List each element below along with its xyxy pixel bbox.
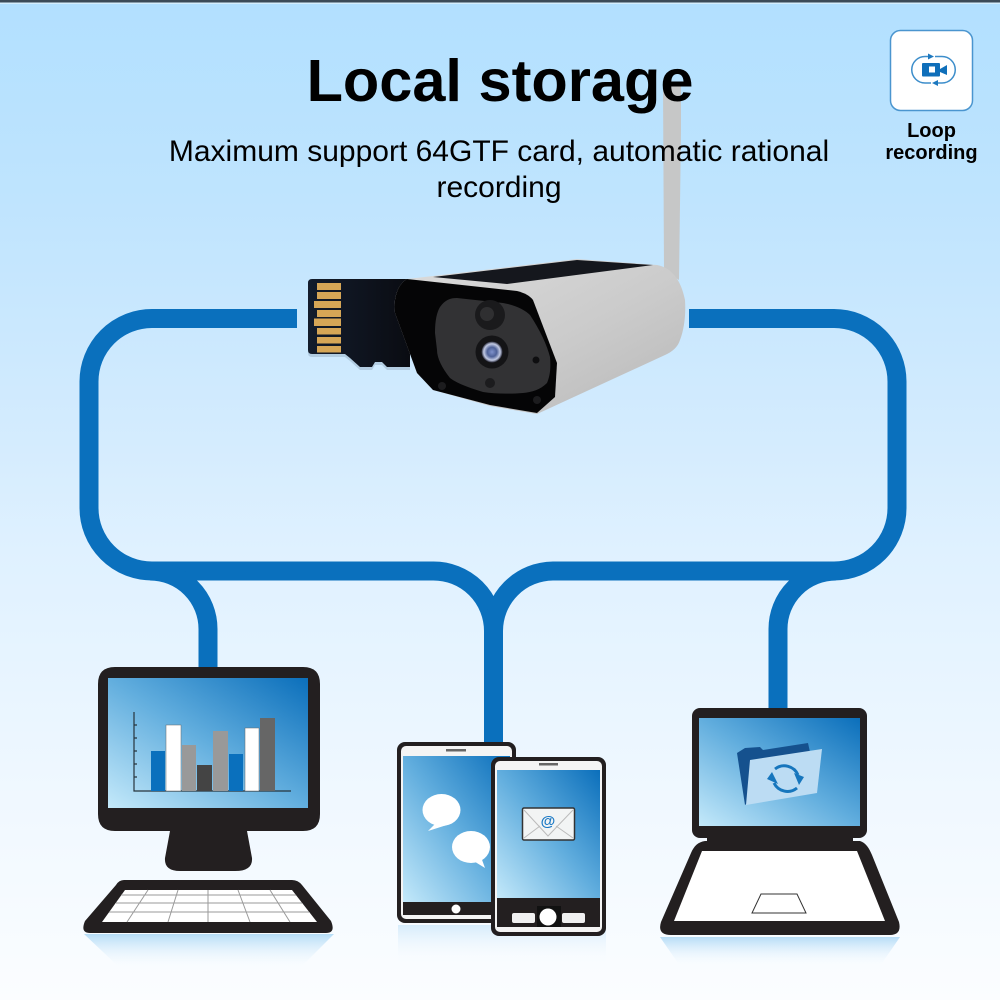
sensor [475, 300, 505, 330]
monitor screen [108, 678, 308, 808]
antenna [663, 85, 681, 280]
speech bubbles [422, 794, 490, 868]
inner face [435, 298, 550, 394]
front phone [491, 757, 606, 936]
keyboard [83, 880, 333, 933]
icon caption: Loop [907, 120, 956, 142]
envelope icon [522, 808, 574, 840]
laptop reflection [660, 937, 900, 966]
back phone [397, 742, 516, 923]
camera [395, 259, 685, 414]
phones [397, 742, 606, 962]
folder icon [737, 743, 822, 805]
phone reflection [398, 925, 606, 962]
bar chart [134, 712, 291, 791]
envelope icon: @ [541, 813, 555, 830]
subtitle: Maximum support 64GTF card, automatic rational recording [169, 135, 829, 204]
keyboard reflection [84, 934, 334, 968]
lens [476, 336, 508, 368]
title: Local storage [307, 47, 693, 114]
loop recording icon [890, 30, 972, 110]
desktop monitor with keyboard [83, 667, 334, 968]
sync arrows [774, 766, 798, 791]
network connection lines [89, 318, 897, 745]
card contacts [314, 283, 341, 352]
camera front [395, 279, 557, 413]
icon caption: recording [885, 142, 978, 164]
laptop base [660, 838, 900, 935]
solar panel [433, 260, 653, 284]
memory card [308, 279, 410, 370]
icon caption [885, 120, 978, 164]
laptop [660, 708, 900, 966]
laptop screen [699, 718, 860, 826]
